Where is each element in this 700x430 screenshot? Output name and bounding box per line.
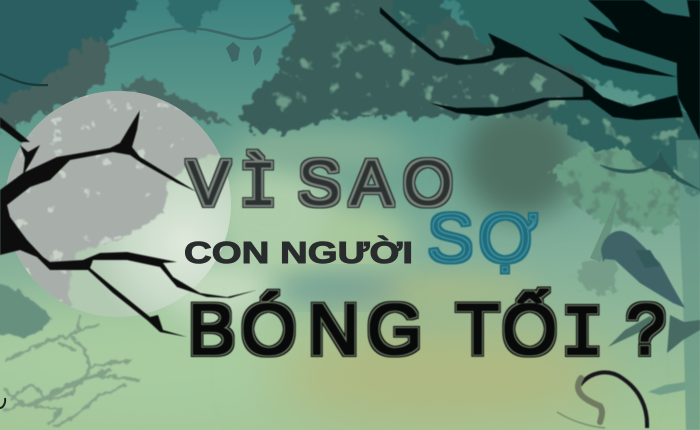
foliage mid right — [552, 148, 680, 295]
dark twig corner bottom left — [0, 398, 5, 408]
left black tree — [0, 110, 257, 337]
canopy masses top — [0, 0, 700, 200]
leaf flecks on canopy — [272, 2, 698, 170]
title line: VÌ SAO: V — [187, 147, 230, 219]
black curl and faded tendril bottom right — [557, 372, 647, 428]
title line: VÌ SAO: O — [403, 147, 453, 219]
icon: crow on branch — [601, 231, 700, 353]
title line: CON NGƯỜI: CON NGƯỜI — [184, 234, 413, 270]
moon — [6, 91, 231, 317]
foliage: background tree canopy — [0, 0, 700, 295]
title line: VÌ SAO: S — [298, 147, 341, 219]
right black tree — [380, 0, 700, 140]
title line: VÌ SAO: A — [350, 147, 393, 219]
title line: VÌ SAO: Ì — [239, 151, 277, 225]
top-left small dark twig — [0, 74, 48, 85]
title line: BÓNG TỐI: N — [308, 291, 359, 370]
pale trunk: right tree in the mist — [648, 140, 700, 430]
title line: BÓNG TỐI: I — [561, 296, 604, 376]
title word: SỢ: Ợ — [478, 199, 538, 277]
title line: BÓNG TỐI: Ó — [241, 291, 296, 370]
title word: SỢ: S — [427, 199, 474, 277]
foliage: lower-left dark leaves overlapping the moon — [0, 280, 52, 337]
title — [184, 147, 666, 376]
title line: BÓNG TỐI: G — [367, 291, 422, 370]
moon shadow patches — [6, 91, 219, 306]
title line: BÓNG TỐI: B — [188, 291, 235, 370]
faded branch right — [600, 152, 700, 190]
question mark: ? — [626, 291, 666, 370]
foliage: faint twigs bottom left — [5, 315, 140, 426]
title line: BÓNG TỐI: T — [456, 291, 499, 370]
title line: BÓNG TỐI: Ố — [502, 290, 557, 370]
